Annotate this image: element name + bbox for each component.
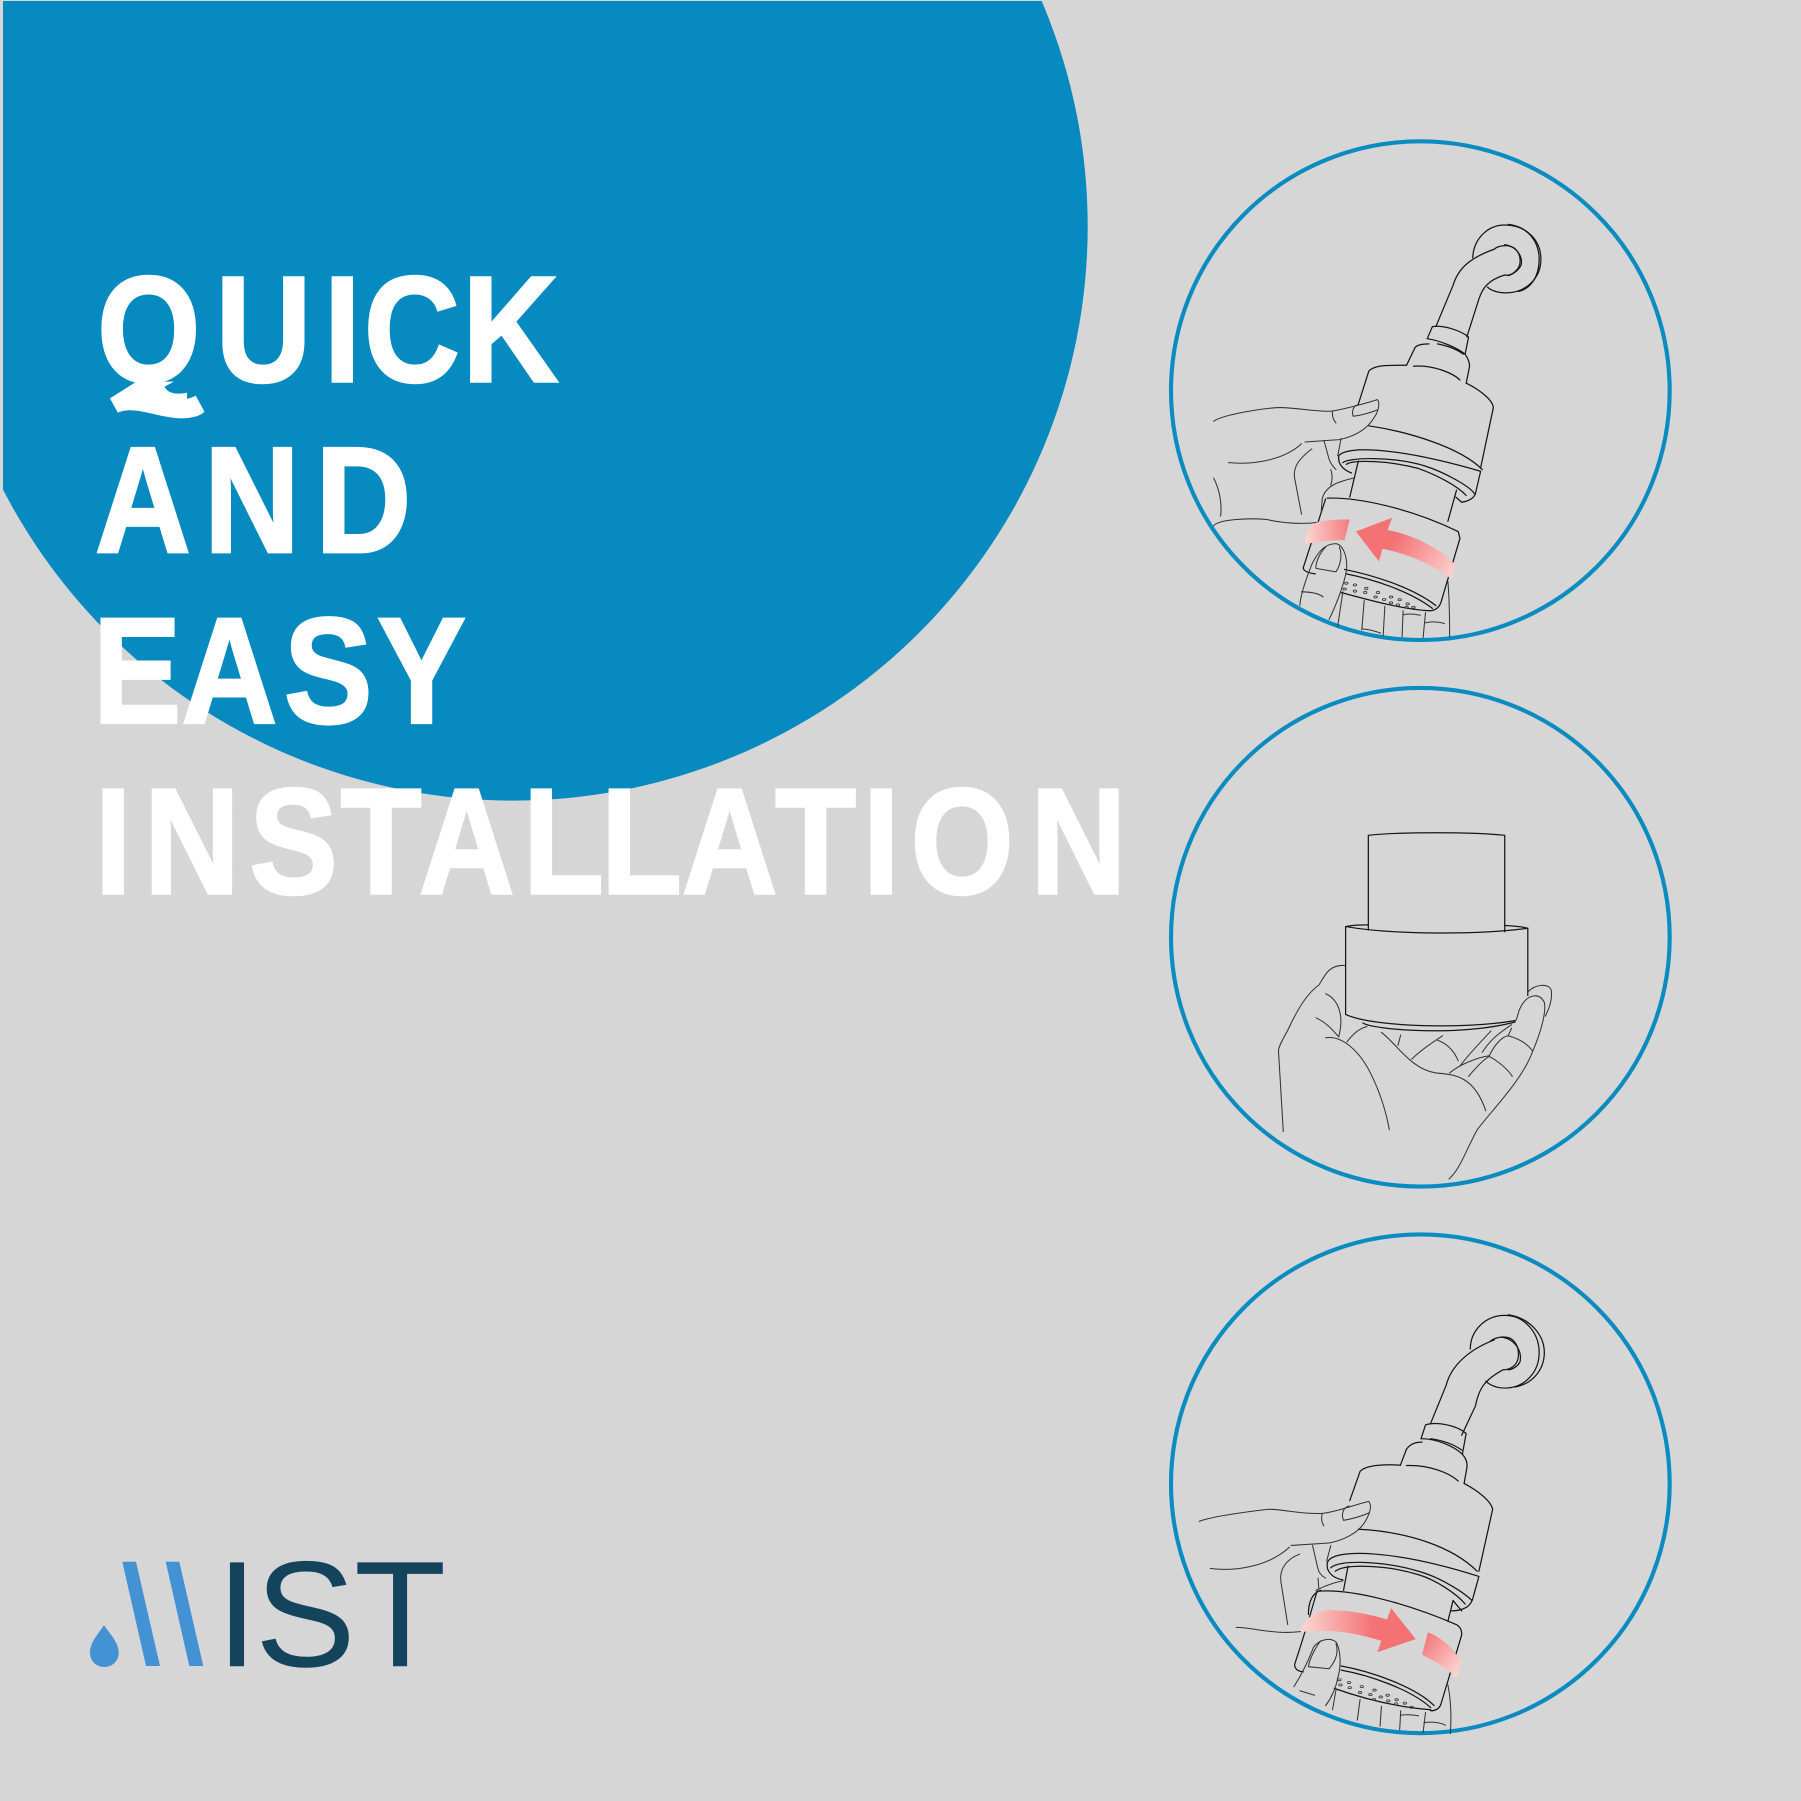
step 1 arrow [1356, 518, 1455, 580]
step 3 hands [1199, 1501, 1451, 1734]
title: INSTALLATION [95, 758, 1126, 926]
MIST logo [90, 1529, 446, 1698]
title: AND [95, 416, 411, 585]
step 1 shower head and arm [1303, 224, 1541, 611]
step 3 shower head and arm [1295, 1315, 1544, 1711]
step 1 hands [1214, 400, 1450, 638]
title: QUICK [97, 246, 558, 414]
step 2: filter in hand illustration [1171, 688, 1670, 1187]
step 2 hand [1278, 965, 1552, 1179]
step 1 circle outline [1171, 141, 1670, 640]
step 3 shower holes [1338, 1679, 1413, 1708]
title [93, 246, 1126, 926]
step 3 arrow tip segment [1422, 1632, 1461, 1678]
logo slanted stripe two [166, 1562, 203, 1666]
step 1 arrow tail [1305, 519, 1350, 544]
step 3 circle outline [1171, 1234, 1670, 1733]
blue circle [0, 0, 1088, 801]
logo letters: IST [216, 1529, 446, 1698]
step 3 arrow [1301, 1608, 1416, 1652]
step 1 shower holes [1343, 582, 1415, 608]
icon: water drop [90, 1625, 119, 1667]
step 2 circle outline [1171, 688, 1670, 1187]
step 2 filter [1346, 833, 1528, 1031]
step 3: tighten on circle illustration [1171, 1234, 1670, 1734]
logo slanted stripe one [122, 1562, 160, 1666]
title: EASY [93, 587, 466, 756]
step 1: tighten off circle illustration [1171, 141, 1670, 640]
